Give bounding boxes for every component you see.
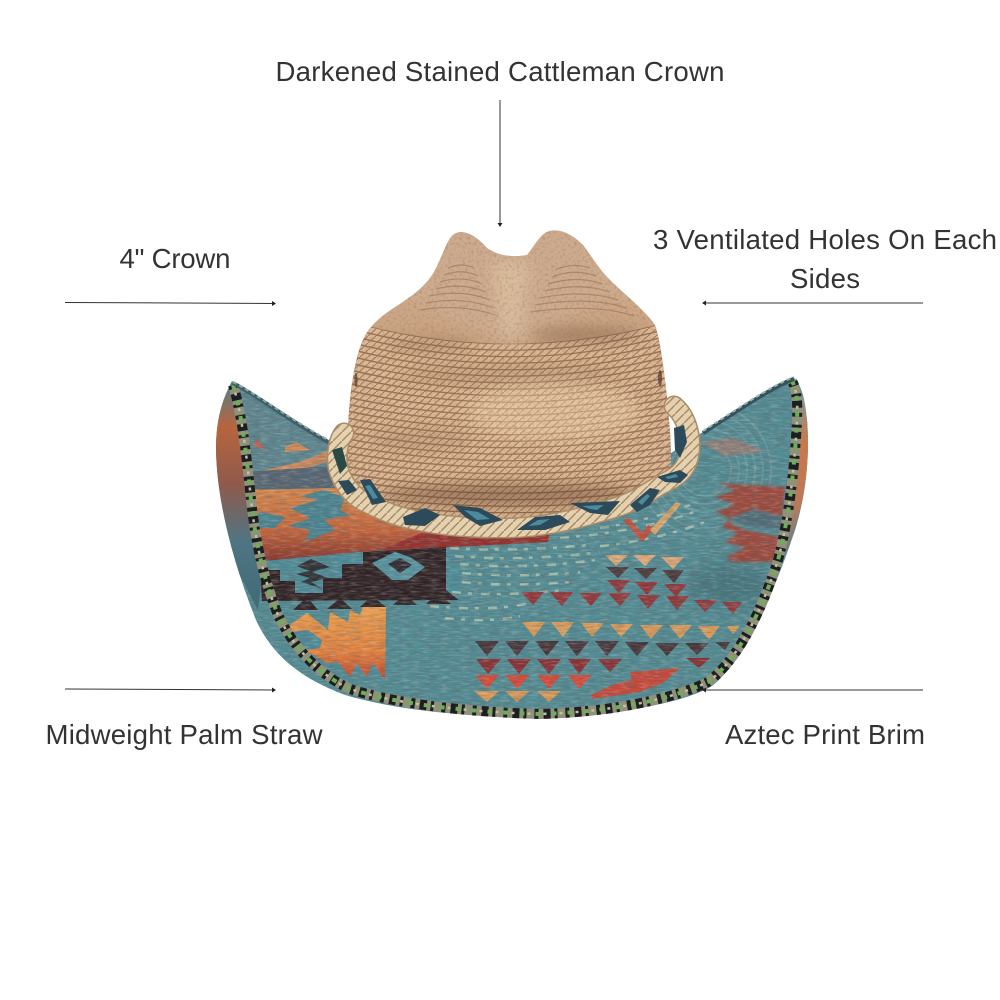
teal diamond [372, 552, 425, 580]
outer turned-up left edge [214, 381, 262, 610]
arrow: ventilated holes [702, 300, 923, 306]
hat illustration [205, 205, 815, 720]
pale water flecks [430, 505, 710, 620]
label: midweight palm straw: Midweight Palm Straw [46, 719, 323, 750]
outer turned-up right edge [785, 391, 808, 553]
right concentric rings [648, 412, 772, 537]
dark tree [296, 559, 330, 589]
brim top edge trims [233, 377, 794, 445]
brim left upper panel [232, 381, 328, 471]
pale red mark upper right [700, 438, 765, 456]
triangle row: red [475, 675, 592, 689]
left lobe inner striations [420, 265, 498, 316]
crown [348, 230, 671, 518]
crown rope rows [340, 322, 680, 516]
band turquoise highlights [365, 474, 678, 526]
hat band rope [332, 406, 690, 530]
chevron [623, 518, 655, 542]
aztec teal figures on orange band [258, 512, 285, 528]
lobe shading [370, 262, 640, 507]
crown speckle [340, 225, 680, 535]
straw grain on brim [205, 370, 815, 720]
arrow: crown label to hat top [498, 100, 502, 227]
band blue braided patches [332, 425, 688, 530]
brim base colour [205, 370, 815, 720]
black stepped shape [260, 547, 459, 601]
left red orange band [240, 488, 550, 563]
teal aztec panel [266, 547, 450, 562]
brim shadow [690, 565, 770, 605]
brim braided edge trim [233, 381, 797, 714]
crown base [348, 230, 671, 514]
pale fleck grain on brim [205, 370, 815, 720]
vent holes [354, 370, 662, 387]
triangle row: light orange [474, 691, 561, 702]
right-edge teal triangles on panel [446, 590, 459, 600]
arrow: midweight palm straw [65, 688, 276, 692]
triangle row: red long [521, 592, 742, 614]
label: 3 ventilated holes on each sides: 3 Ventilated Holes On Each [653, 224, 997, 255]
label: 3 ventilated holes on each sides [653, 224, 997, 294]
crown lobe pinch fading the upper rows [402, 230, 637, 348]
triangle row: maroon [476, 658, 710, 674]
large red corner shape [591, 668, 680, 699]
arrow: 4 inch crown [65, 301, 276, 306]
right red brown pattern [715, 483, 785, 562]
triangle row: pale [605, 555, 684, 569]
orange stepped patch [287, 607, 386, 680]
label: aztec print brim: Aztec Print Brim [725, 719, 925, 750]
left dark grey band [253, 466, 336, 490]
label: 3 ventilated holes on each sides: Sides [790, 263, 860, 294]
triangle row: dark [606, 567, 684, 583]
left small orange marks [265, 451, 328, 470]
black triangle row [293, 600, 451, 610]
label: 4 inch crown: 4" Crown [120, 243, 230, 274]
arrow: aztec print brim [702, 688, 923, 692]
right lobe inner striations [530, 265, 634, 316]
triangle row: dark long [475, 641, 730, 656]
triangle row: orange [522, 622, 740, 640]
brim [205, 370, 815, 720]
triangle row: red short [607, 580, 687, 597]
title label: Darkened Stained Cattleman Crown: Darkened Stained Cattleman Crown [276, 56, 724, 87]
